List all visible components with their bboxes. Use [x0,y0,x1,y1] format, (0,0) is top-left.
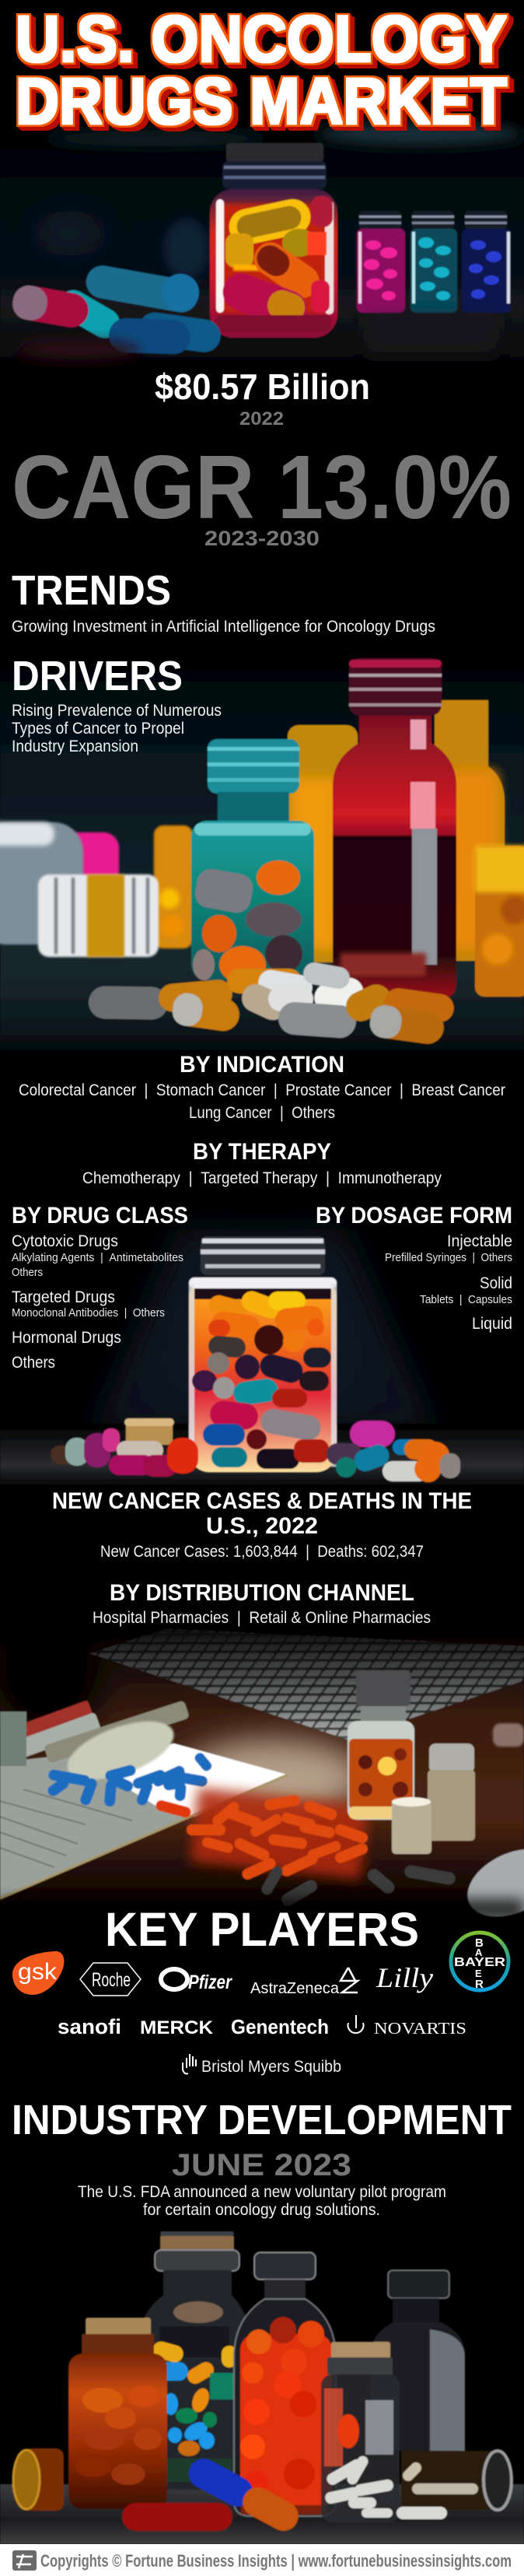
icon: red capsules [155,1788,369,1881]
by drug class items: Targeted Drugs [12,1288,115,1306]
new cancer cases heading: U.S., 2022 [206,1513,318,1539]
footer bar [0,2544,524,2576]
logo: Merck: MERCK [140,2017,214,2038]
by indication heading: BY INDICATION [180,1052,344,1078]
logo: Roche: Roche [92,1969,131,1991]
logo: sanofi: sanofi [58,2015,121,2038]
logo: AstraZeneca [250,1968,358,1997]
logo: Lilly: Lilly [376,1962,433,1993]
logo: Novartis: NOVARTIS [374,2019,466,2038]
title [16,2,507,138]
by dosage form items: Tablets | Capsules [420,1293,512,1306]
icon: dark bottle [371,2270,465,2451]
market size value: $80.57 Billion [155,366,370,407]
logo: Bayer [451,1933,508,1991]
icon: blue and orange capsule [183,2454,303,2536]
icon: clear bottle with red gelcaps [234,2252,336,2516]
logo: AstraZeneca: AstraZeneca [250,1980,340,1997]
icon: colourful pills [151,2339,237,2482]
icon: red bottle [333,658,456,998]
trends heading: TRENDS [12,567,171,614]
by therapy heading: BY THERAPY [193,1139,331,1165]
by drug class items: Cytotoxic Drugs [12,1232,118,1250]
logo: gsk [12,1951,64,1995]
new cancer cases figures: New Cancer Cases: 1,603,844 | Deaths: 602,347 [100,1543,424,1561]
by drug class items: Monoclonal Antibodies | Others [12,1306,165,1320]
icon: bottles on side [13,2448,512,2511]
by drug class items: Others [12,1266,43,1279]
icon: teal bottle [191,739,314,983]
icon: small cork jar with white tablets [321,2342,447,2522]
icon: capsule pile [89,961,456,1046]
development description [78,2183,446,2219]
forecast period: 2023-2030 [204,527,320,550]
icon: large jar [210,143,337,338]
by distribution channel items: Hospital Pharmacies | Retail & Online Pharmacies [93,1609,431,1627]
by drug class items: Hormonal Drugs [12,1329,121,1347]
icon: amber pill bottle [348,1670,414,1820]
icon: back clear jar [138,2231,250,2490]
icon: three small jars [357,211,511,313]
logo: Bayer: E [475,1968,482,1979]
logo: Genentech: Genentech [231,2015,329,2038]
key player logos [12,1933,508,2076]
logo: Bayer: A [475,1947,483,1958]
by indication items: Lung Cancer | Others [189,1104,335,1122]
new cancer cases heading: NEW CANCER CASES & DEATHS IN THE [52,1488,472,1514]
icon: grey capsules [260,1864,456,1908]
icon: pills left of jar [51,1418,198,1477]
by indication items [19,1081,505,1122]
bottles image [0,2231,524,2544]
icon: white tablets [60,1709,181,1792]
logo: Bristol Myers Squibb: Bristol Myers Squibb [201,2058,341,2076]
logo: Bayer: R [475,1978,484,1991]
icon: computer mouse [457,1835,524,1930]
trends text: Growing Investment in Artificial Intelligence for Oncology Drugs [12,618,435,636]
by drug class items [12,1232,183,1372]
icon: amber jar [68,2318,167,2509]
icon: loose capsules [10,263,222,355]
drivers text: Types of Cancer to Propel [12,720,184,738]
by dosage form items: Liquid [472,1315,512,1333]
by dosage form items [385,1232,512,1333]
hero image: glowing pill jars [0,117,524,373]
by dosage form items: Solid [480,1274,512,1292]
drivers image: bottles and capsules [0,646,524,1058]
logo: Pfizer [161,1969,232,1993]
development date: JUNE 2023 [172,2148,351,2182]
icon: Fortune Business Insights logo [12,2550,37,2571]
logo: gsk: gsk [18,1959,58,1985]
icon: pills right of jar [327,1421,460,1487]
by drug class items: Others [12,1354,55,1372]
by distribution channel heading: BY DISTRIBUTION CHANNEL [110,1580,414,1606]
icon: labelled jars [392,1744,475,1854]
drivers heading: DRIVERS [12,653,183,699]
icon: jar [189,1236,337,1472]
drivers text [12,702,222,755]
drivers text: Industry Expansion [12,738,138,755]
logo: Bayer: B [475,1936,484,1950]
by therapy items: Chemotherapy | Targeted Therapy | Immunotherapy [82,1169,442,1187]
by dosage form items: Prefilled Syringes | Others [385,1251,512,1264]
base year: 2022 [239,408,284,429]
icon: keyboard [90,1629,524,1740]
drivers text: Rising Prevalence of Numerous [12,702,222,720]
development description: for certain oncology drug solutions. [143,2201,380,2219]
by drug class heading: BY DRUG CLASS [12,1203,188,1228]
central pill jar image [0,1206,524,1488]
logo: Bayer: BAYER [454,1956,506,1969]
icon: overturned white bottle [0,822,159,957]
logo: Novartis [348,2015,466,2038]
new cancer cases heading [52,1488,472,1539]
logo: Bristol Myers Squibb [183,2054,341,2076]
icon: vials and syringes [0,1700,190,1766]
by dosage form heading: BY DOSAGE FORM [316,1203,512,1228]
icon: prescription paper [0,1744,288,1898]
icon: blue capsules [46,1751,214,1807]
desk image: keyboard, prescription and capsules [0,1626,524,1930]
key players heading: KEY PLAYERS [105,1903,419,1956]
development description: The U.S. FDA announced a new voluntary pilot program [78,2183,446,2201]
logo: Pfizer: Pfizer [188,1971,232,1993]
by drug class items: Alkylating Agents | Antimetabolites [12,1251,183,1264]
logo: Roche [80,1963,141,1996]
icon: red capsule [122,2503,232,2531]
by dosage form items: Injectable [447,1232,512,1250]
